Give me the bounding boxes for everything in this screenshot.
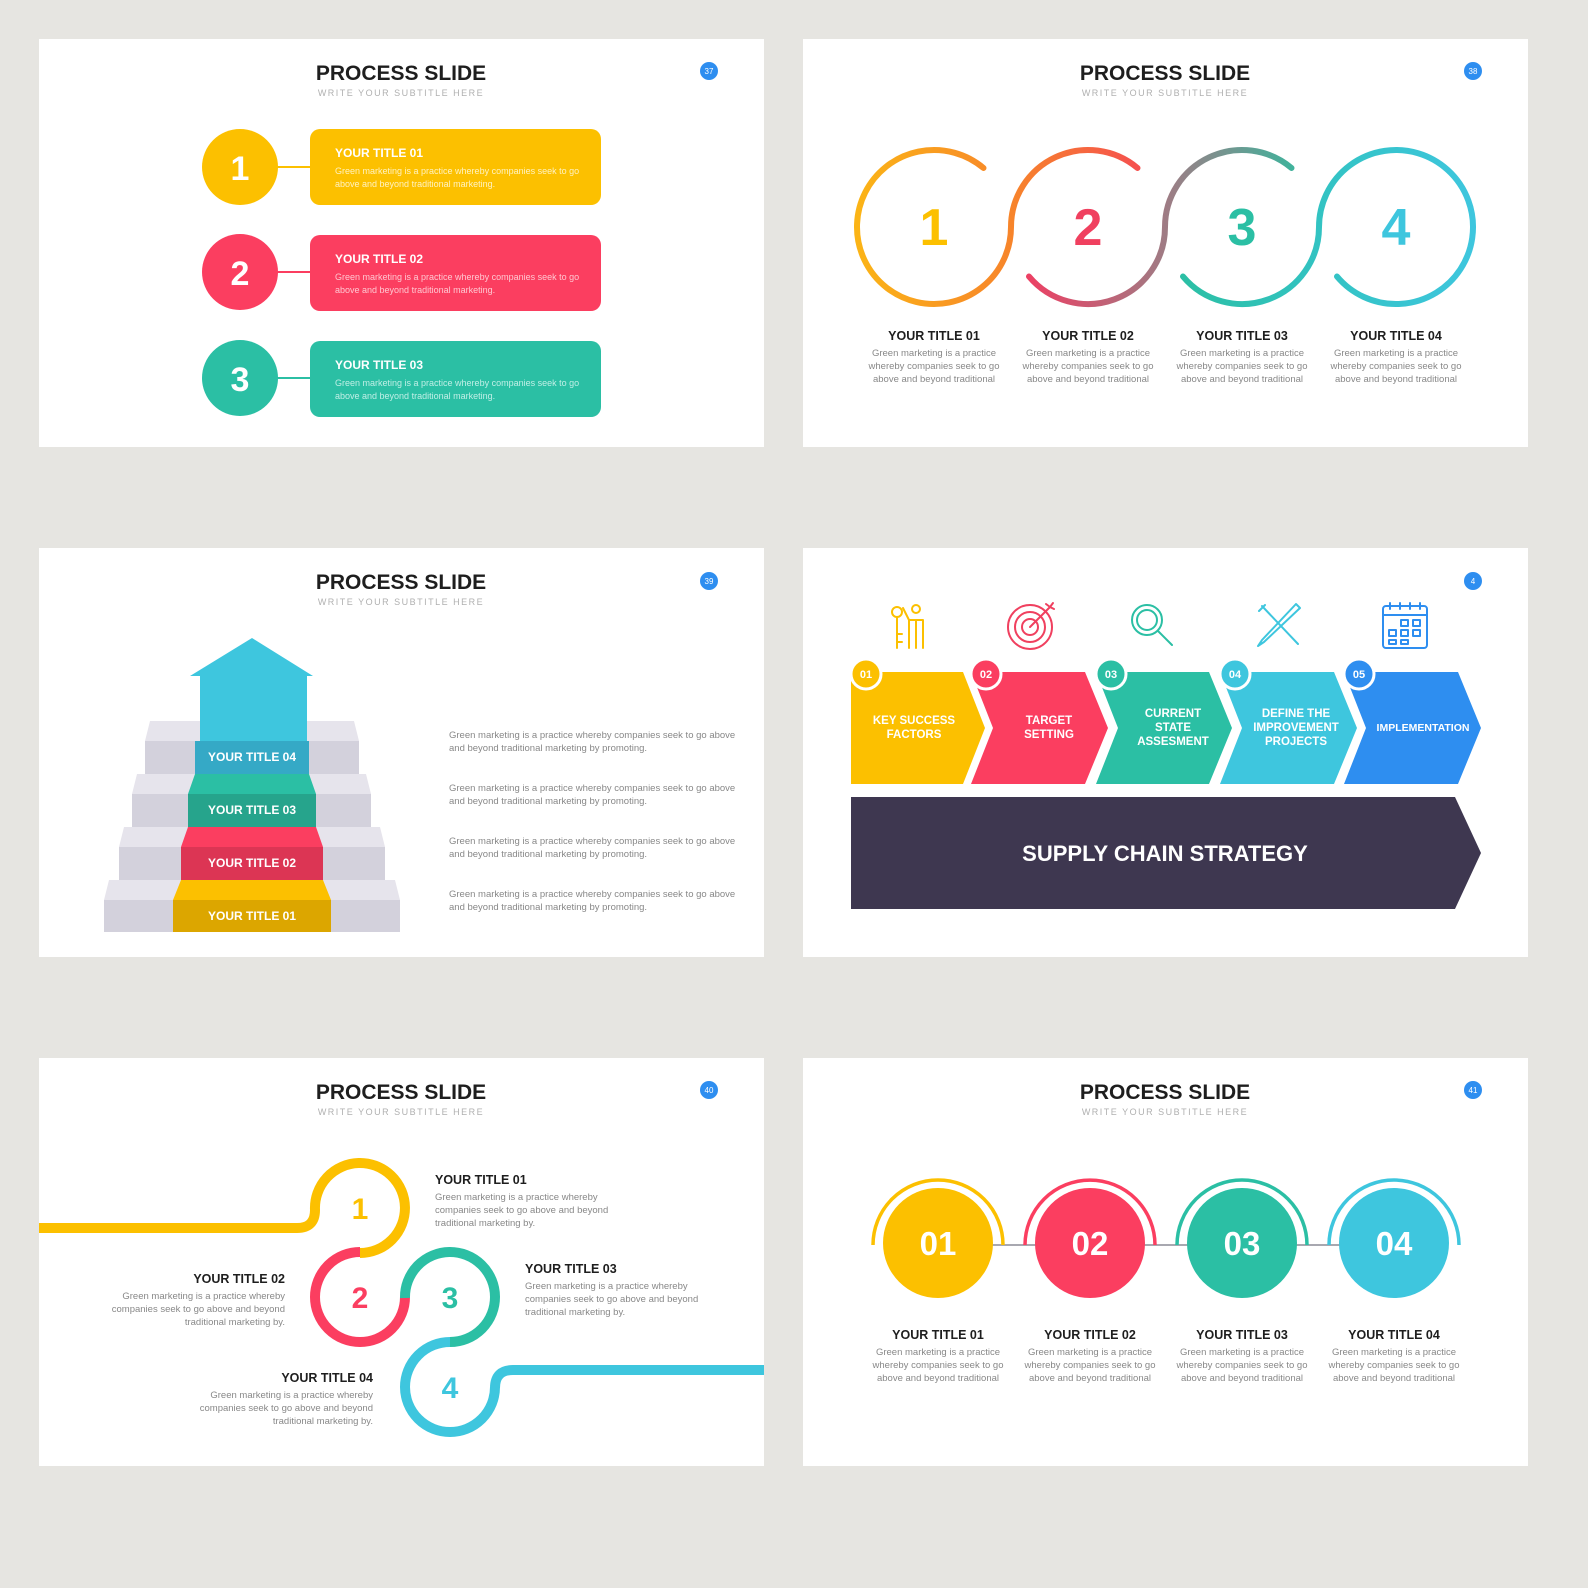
- chevrons: STATE: [1155, 722, 1191, 734]
- arrow: [190, 638, 313, 741]
- numbers: 1: [352, 1193, 368, 1226]
- text blocks: YOUR TITLE 04: [281, 1371, 373, 1385]
- descriptions: and beyond traditional marketing by promoting.: [449, 849, 647, 860]
- text blocks: Green marketing is a practice whereby: [435, 1192, 598, 1203]
- numbers: 4: [442, 1372, 459, 1405]
- text blocks: Green marketing is a practice whereby: [210, 1390, 373, 1401]
- icon: magnifier: [1132, 605, 1172, 645]
- captions: Green marketing is a practice: [1332, 1347, 1456, 1358]
- page badge: [1464, 572, 1482, 590]
- step 3: YOUR TITLE 03: [335, 358, 423, 372]
- text blocks: traditional marketing by.: [185, 1317, 285, 1328]
- captions: Green marketing is a practice: [1180, 348, 1304, 359]
- page badge: 40: [705, 1086, 714, 1095]
- staircase: [104, 638, 400, 932]
- chain of circles: [857, 150, 1473, 304]
- captions: whereby companies seek to go: [1022, 361, 1153, 372]
- captions: Green marketing is a practice: [876, 1347, 1000, 1358]
- captions: [872, 1328, 1459, 1384]
- numbers: 4: [1382, 199, 1411, 257]
- numbers: 1: [920, 199, 948, 257]
- page badge: [700, 572, 718, 590]
- text blocks: companies seek to go above and beyond: [525, 1294, 698, 1305]
- descriptions: Green marketing is a practice whereby companies seek to go above: [449, 783, 735, 794]
- captions: whereby companies seek to go: [1176, 361, 1307, 372]
- chevrons: TARGET: [1026, 715, 1072, 727]
- chevrons: CURRENT: [1145, 708, 1201, 720]
- title: WRITE YOUR SUBTITLE HERE: [318, 88, 484, 98]
- chevrons: ASSESMENT: [1137, 736, 1209, 748]
- panel: slide 38 linked circles: [803, 39, 1528, 447]
- number badges: 02: [980, 669, 992, 681]
- staircase: YOUR TITLE 01: [208, 909, 296, 923]
- page badge: [1464, 62, 1482, 80]
- circles: [873, 1180, 1459, 1245]
- text blocks: [112, 1173, 698, 1427]
- step 3: Green marketing is a practice whereby companies seek to go: [335, 378, 579, 388]
- descriptions: Green marketing is a practice whereby companies seek to go above: [449, 836, 735, 847]
- text blocks: companies seek to go above and beyond: [200, 1403, 373, 1414]
- title: WRITE YOUR SUBTITLE HERE: [1082, 1107, 1248, 1117]
- captions: above and beyond traditional: [1181, 1373, 1303, 1384]
- title: [316, 1081, 486, 1117]
- panel: slide 37 numbered list: [39, 39, 764, 447]
- number badges: 03: [1105, 669, 1117, 681]
- captions: Green marketing is a practice: [872, 348, 996, 359]
- staircase: YOUR TITLE 04: [208, 750, 296, 764]
- step 2: [202, 234, 601, 311]
- panel: supply chain strategy: [803, 548, 1528, 957]
- numbers: 3: [1228, 199, 1256, 257]
- descriptions: [449, 730, 735, 913]
- page badge: 41: [1469, 1086, 1478, 1095]
- text blocks: Green marketing is a practice whereby: [525, 1281, 688, 1292]
- descriptions: Green marketing is a practice whereby companies seek to go above: [449, 730, 735, 741]
- panel: slide 39 stairs: [39, 548, 764, 957]
- page badge: 39: [705, 577, 714, 586]
- title: [1080, 62, 1250, 98]
- captions: whereby companies seek to go: [1176, 1360, 1307, 1371]
- captions: above and beyond traditional: [1333, 1373, 1455, 1384]
- chevrons: IMPLEMENTATION: [1377, 722, 1469, 734]
- number badges: 01: [860, 669, 872, 681]
- icon: key and person: [892, 605, 923, 648]
- captions: Green marketing is a practice: [1026, 348, 1150, 359]
- captions: YOUR TITLE 03: [1196, 1328, 1288, 1342]
- icon: target: [1008, 603, 1054, 649]
- text blocks: companies seek to go above and beyond: [435, 1205, 608, 1216]
- staircase: YOUR TITLE 03: [208, 803, 296, 817]
- text blocks: traditional marketing by.: [525, 1307, 625, 1318]
- step 1: YOUR TITLE 01: [335, 146, 423, 160]
- icon: tools: [1258, 604, 1300, 646]
- numbers: 2: [1074, 199, 1102, 257]
- chevrons: DEFINE THE: [1262, 708, 1331, 720]
- page badge: 4: [1471, 577, 1476, 586]
- connector: [938, 1244, 1394, 1246]
- captions: YOUR TITLE 01: [888, 329, 980, 343]
- numbers: 3: [442, 1282, 458, 1315]
- numbers: [920, 199, 1411, 257]
- panel: slide 41 circles: 01: [920, 1225, 956, 1262]
- number badges: 05: [1353, 669, 1365, 681]
- winding line: [39, 1163, 764, 1432]
- captions: above and beyond traditional: [873, 374, 995, 385]
- numbers: [352, 1193, 459, 1405]
- number badges: [851, 659, 1374, 689]
- chevrons: FACTORS: [887, 729, 942, 741]
- text blocks: Green marketing is a practice whereby: [122, 1291, 285, 1302]
- number badges: 04: [1229, 669, 1242, 681]
- captions: whereby companies seek to go: [1328, 1360, 1459, 1371]
- captions: Green marketing is a practice: [1028, 1347, 1152, 1358]
- title: WRITE YOUR SUBTITLE HERE: [318, 597, 484, 607]
- panel: slide 41 circles: 04: [1376, 1225, 1413, 1262]
- staircase: YOUR TITLE 02: [208, 856, 296, 870]
- step 1: Green marketing is a practice whereby companies seek to go: [335, 166, 579, 176]
- captions: YOUR TITLE 04: [1348, 1328, 1440, 1342]
- strategy banner: SUPPLY CHAIN STRATEGY: [1022, 841, 1308, 866]
- chevrons: KEY SUCCESS: [873, 715, 955, 727]
- page badge: 37: [705, 67, 714, 76]
- chevrons: SETTING: [1024, 729, 1074, 741]
- descriptions: and beyond traditional marketing by promoting.: [449, 796, 647, 807]
- captions: Green marketing is a practice: [1334, 348, 1458, 359]
- captions: [868, 329, 1461, 385]
- title: [316, 62, 486, 98]
- captions: YOUR TITLE 02: [1044, 1328, 1136, 1342]
- page badge: [1464, 1081, 1482, 1099]
- step 1: above and beyond traditional marketing.: [335, 179, 495, 189]
- text blocks: traditional marketing by.: [435, 1218, 535, 1229]
- step 2: Green marketing is a practice whereby companies seek to go: [335, 272, 579, 282]
- descriptions: and beyond traditional marketing by promoting.: [449, 743, 647, 754]
- step 1: [202, 129, 601, 205]
- page badge: [700, 1081, 718, 1099]
- captions: above and beyond traditional: [1027, 374, 1149, 385]
- title: PROCESS SLIDE: [1080, 1081, 1250, 1104]
- strategy banner: [851, 797, 1481, 909]
- captions: YOUR TITLE 02: [1042, 329, 1134, 343]
- title: PROCESS SLIDE: [1080, 62, 1250, 85]
- title: PROCESS SLIDE: [316, 1081, 486, 1104]
- text blocks: companies seek to go above and beyond: [112, 1304, 285, 1315]
- title: WRITE YOUR SUBTITLE HERE: [1082, 88, 1248, 98]
- title: [316, 571, 486, 607]
- step 2: above and beyond traditional marketing.: [335, 285, 495, 295]
- title: [1080, 1081, 1250, 1117]
- captions: whereby companies seek to go: [1330, 361, 1461, 372]
- captions: above and beyond traditional: [1029, 1373, 1151, 1384]
- captions: whereby companies seek to go: [868, 361, 999, 372]
- text blocks: YOUR TITLE 01: [435, 1173, 527, 1187]
- page badge: 38: [1469, 67, 1478, 76]
- captions: whereby companies seek to go: [1024, 1360, 1155, 1371]
- panel: slide 41 circles: [803, 1058, 1528, 1466]
- icon: calendar: [1383, 603, 1427, 648]
- step 3: 3: [231, 361, 249, 399]
- title: PROCESS SLIDE: [316, 571, 486, 594]
- title: PROCESS SLIDE: [316, 62, 486, 85]
- icons: [892, 603, 1427, 649]
- captions: YOUR TITLE 04: [1350, 329, 1442, 343]
- captions: above and beyond traditional: [1181, 374, 1303, 385]
- title: WRITE YOUR SUBTITLE HERE: [318, 1107, 484, 1117]
- step 3: above and beyond traditional marketing.: [335, 391, 495, 401]
- panel: slide 40 winding path: [39, 1058, 764, 1466]
- descriptions: Green marketing is a practice whereby companies seek to go above: [449, 889, 735, 900]
- text blocks: YOUR TITLE 02: [193, 1272, 285, 1286]
- panel: slide 41 circles: 02: [1072, 1225, 1108, 1262]
- captions: above and beyond traditional: [877, 1373, 999, 1384]
- step 1: 1: [231, 150, 249, 188]
- page badge: [700, 62, 718, 80]
- captions: whereby companies seek to go: [872, 1360, 1003, 1371]
- step 2: 2: [231, 255, 249, 293]
- chevrons: IMPROVEMENT: [1253, 722, 1339, 734]
- step 3: [202, 340, 601, 417]
- captions: above and beyond traditional: [1335, 374, 1457, 385]
- numbers: 2: [352, 1282, 368, 1315]
- captions: YOUR TITLE 03: [1196, 329, 1288, 343]
- chevrons: [851, 672, 1481, 784]
- step 2: YOUR TITLE 02: [335, 252, 423, 266]
- chevrons: PROJECTS: [1265, 736, 1327, 748]
- descriptions: and beyond traditional marketing by promoting.: [449, 902, 647, 913]
- text blocks: YOUR TITLE 03: [525, 1262, 617, 1276]
- captions: Green marketing is a practice: [1180, 1347, 1304, 1358]
- panel: slide 41 circles: 03: [1224, 1225, 1260, 1262]
- text blocks: traditional marketing by.: [273, 1416, 373, 1427]
- captions: YOUR TITLE 01: [892, 1328, 984, 1342]
